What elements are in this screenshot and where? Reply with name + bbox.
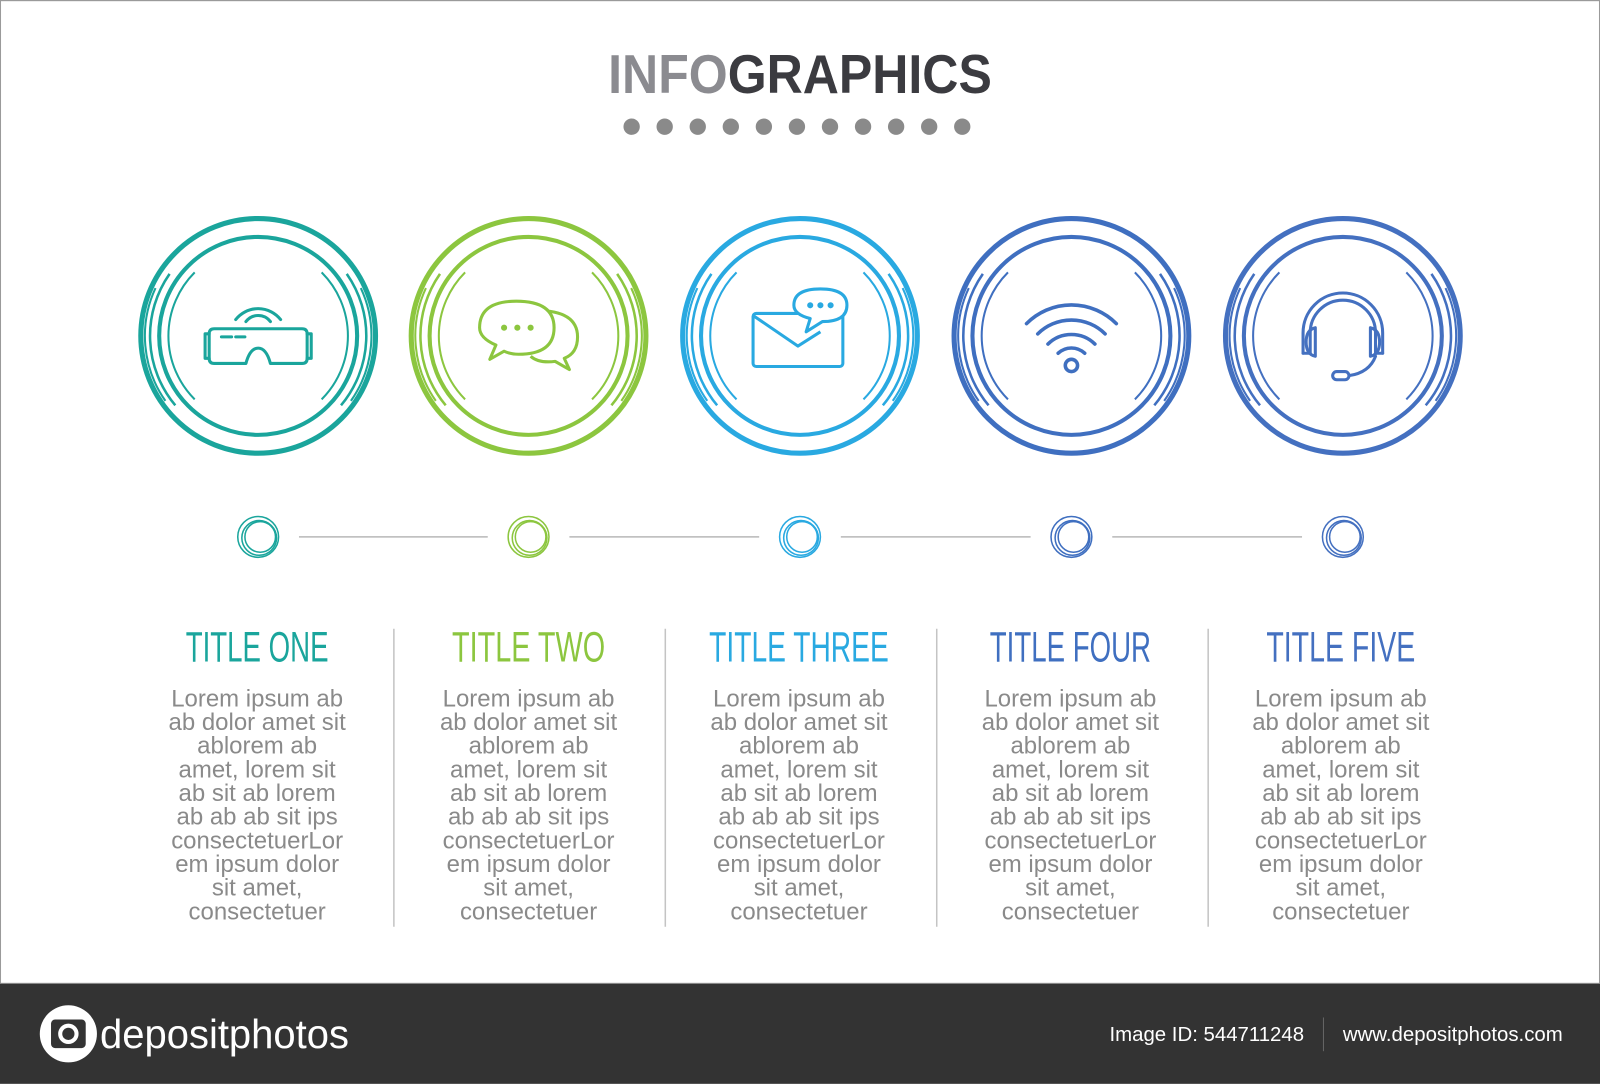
- text 4: amet, lorem sit: [992, 756, 1149, 783]
- text 5: Lorem ipsum ab: [1255, 685, 1427, 712]
- small circle 4: [1051, 516, 1092, 557]
- footer image id: Image ID: 544711248: [1109, 1024, 1304, 1046]
- icon: wifi: [1027, 305, 1116, 372]
- text 1: sit amet,: [212, 875, 302, 902]
- text 5: ab dolor amet sit: [1252, 709, 1430, 736]
- step 1: [141, 219, 376, 925]
- text 4: consectetuer: [1002, 898, 1139, 925]
- icon: chat bubbles: [480, 301, 578, 370]
- text 2: Lorem ipsum ab: [443, 685, 615, 712]
- text 2: ablorem ab: [469, 733, 589, 760]
- text 1: ab sit ab lorem: [179, 780, 336, 807]
- text 2: ab dolor amet sit: [440, 709, 618, 736]
- footer bar: [0, 984, 1600, 1084]
- text 4: ab dolor amet sit: [982, 709, 1159, 736]
- circle 1 with VR icon: [141, 219, 376, 453]
- text 1: Lorem ipsum ab: [171, 685, 343, 712]
- text 4: ablorem ab: [1010, 733, 1130, 760]
- text 1: ablorem ab: [197, 733, 317, 760]
- text 3: em ipsum dolor: [717, 851, 881, 878]
- text 2: em ipsum dolor: [447, 851, 611, 878]
- step 2: [411, 219, 646, 925]
- text 2: amet, lorem sit: [450, 756, 607, 783]
- text 3: ab dolor amet sit: [710, 709, 888, 736]
- small circle 1: [238, 516, 279, 557]
- text 3: consectetuer: [730, 898, 868, 925]
- text 1: consectetuer: [189, 898, 326, 925]
- footer logo: [40, 1005, 349, 1062]
- text 1: ab dolor amet sit: [169, 709, 346, 736]
- circle 4 with wifi icon: [954, 219, 1189, 453]
- circle 5 with headset icon: [1226, 219, 1460, 453]
- text 2: ab ab ab sit ips: [448, 804, 609, 831]
- text 5: consectetuerLor: [1255, 827, 1427, 854]
- step 5: [1226, 219, 1460, 925]
- icon: envelope with bubble: [753, 289, 847, 366]
- text 2: consectetuerLor: [443, 827, 615, 854]
- text 4: ab ab ab sit ips: [990, 804, 1151, 831]
- small circle 5: [1322, 516, 1363, 557]
- text 3: Lorem ipsum ab: [713, 685, 885, 712]
- footer url: www.depositphotos.com: [1342, 1024, 1563, 1046]
- title: INFOGRAPHICS: [608, 43, 992, 105]
- dots row: [623, 119, 970, 135]
- title three: TITLE THREE: [709, 623, 889, 671]
- text 2: ab sit ab lorem: [450, 780, 607, 807]
- circle 3 with mail icon: [683, 219, 917, 453]
- icon: headset: [1303, 293, 1383, 380]
- title four: TITLE FOUR: [990, 623, 1151, 671]
- text 5: em ipsum dolor: [1259, 851, 1423, 878]
- text 2: consectetuer: [460, 898, 597, 925]
- icon: VR headset: [205, 309, 311, 363]
- step 3: [683, 219, 917, 925]
- title five: TITLE FIVE: [1266, 623, 1415, 671]
- text 1: em ipsum dolor: [175, 851, 339, 878]
- step 4: [954, 219, 1189, 925]
- text 3: ab sit ab lorem: [720, 780, 878, 807]
- text 5: ab ab ab sit ips: [1260, 804, 1421, 831]
- text 2: sit amet,: [483, 875, 574, 902]
- text 4: sit amet,: [1025, 875, 1116, 902]
- text 3: sit amet,: [754, 875, 844, 902]
- text 4: em ipsum dolor: [988, 851, 1152, 878]
- timeline lines: [299, 536, 1302, 538]
- text 3: ab ab ab sit ips: [718, 804, 880, 831]
- text 5: amet, lorem sit: [1262, 756, 1420, 783]
- circle 2 with chat icon: [411, 219, 646, 453]
- text 5: consectetuer: [1272, 898, 1409, 925]
- title one: TITLE ONE: [186, 623, 329, 671]
- text 3: consectetuerLor: [713, 827, 885, 854]
- text 3: amet, lorem sit: [720, 756, 878, 783]
- text 1: amet, lorem sit: [179, 756, 336, 783]
- text 4: consectetuerLor: [984, 827, 1156, 854]
- footer logo: depositphotos: [100, 1011, 349, 1057]
- text 3: ablorem ab: [739, 733, 859, 760]
- small circle 2: [508, 516, 549, 557]
- text 4: ab sit ab lorem: [992, 780, 1149, 807]
- text 5: ablorem ab: [1281, 733, 1401, 760]
- dividers: [394, 629, 1208, 927]
- text 5: sit amet,: [1296, 875, 1386, 902]
- small circle 3: [780, 516, 820, 557]
- text 4: Lorem ipsum ab: [984, 685, 1156, 712]
- text 1: consectetuerLor: [171, 827, 343, 854]
- title two: TITLE TWO: [452, 623, 605, 671]
- text 1: ab ab ab sit ips: [177, 804, 338, 831]
- text 5: ab sit ab lorem: [1262, 780, 1419, 807]
